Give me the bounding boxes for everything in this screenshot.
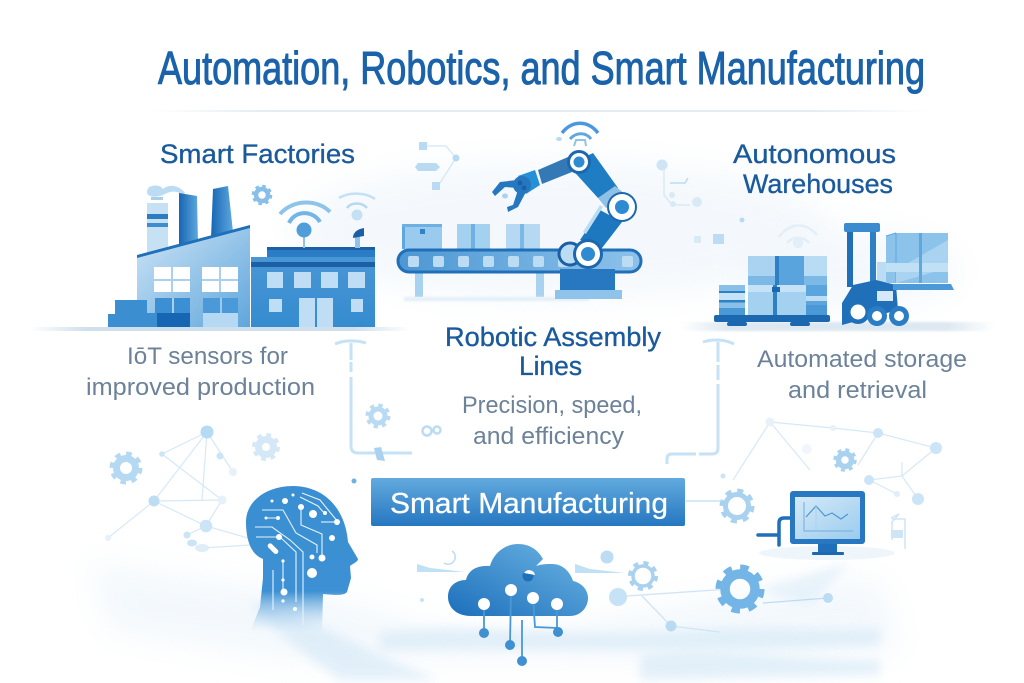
icon: monitor [758,491,895,560]
left network [105,426,255,552]
panel: autonomous warehouses [656,139,967,404]
icon: factory [108,186,375,327]
heading: autonomous warehouses: Autonomous [733,139,896,169]
icon: forklift [842,223,954,326]
caption: warehouses [757,346,967,404]
icon: AI head [246,486,358,632]
caption: robotic [462,392,642,450]
icon: faint nodes [656,160,744,244]
ground line left [30,327,410,331]
heading: robotic assembly lines: Lines [519,351,582,381]
icon: pallet boxes [714,256,830,326]
panel: robotic assembly [398,123,661,450]
heading: autonomous warehouses [733,139,896,199]
caption: factories [86,343,315,401]
caption: factories: improved production [86,374,315,401]
arrow: left connector [335,341,412,461]
caption: warehouses: and retrieval [788,377,927,404]
icon: double gear [422,426,440,436]
icon: large gear [719,568,761,610]
icon: cloud side connectors [417,550,730,632]
icon: gear ring right [722,491,752,521]
icon: faint document [891,514,905,549]
heading: robotic assembly lines [445,322,661,381]
caption: robotic: and efficiency [473,423,624,450]
smart manufacturing banner: Smart Manufacturing [390,488,668,520]
icon: gear small [368,406,388,426]
icon: robot arm [492,150,637,299]
icon: conveyor [398,224,641,301]
caption: robotic: Precision, speed, [462,392,642,419]
heading: smart factories: Smart Factories [160,139,355,169]
icon: gear ring middle [630,563,656,589]
panel: smart factories [86,139,375,401]
icon: wifi [556,123,598,146]
right network [720,418,942,505]
arrow: right connector [667,340,734,464]
icon: gear [253,186,271,204]
caption: warehouses: Automated storage [757,346,967,373]
icon: faint wifi [779,225,817,247]
icon: gear upper right [835,450,855,470]
smart manufacturing banner [371,478,685,526]
icon: gear left [112,454,140,482]
icon: cloud [448,544,588,666]
heading: robotic assembly lines: Robotic Assembly [445,322,661,352]
background washes [90,160,960,680]
icon: gear faint [254,435,278,459]
ground line right [680,322,995,331]
heading: autonomous warehouses: Warehouses [743,169,893,199]
caption: factories: IōT sensors for [127,343,288,370]
icon: process diagram [415,142,460,190]
